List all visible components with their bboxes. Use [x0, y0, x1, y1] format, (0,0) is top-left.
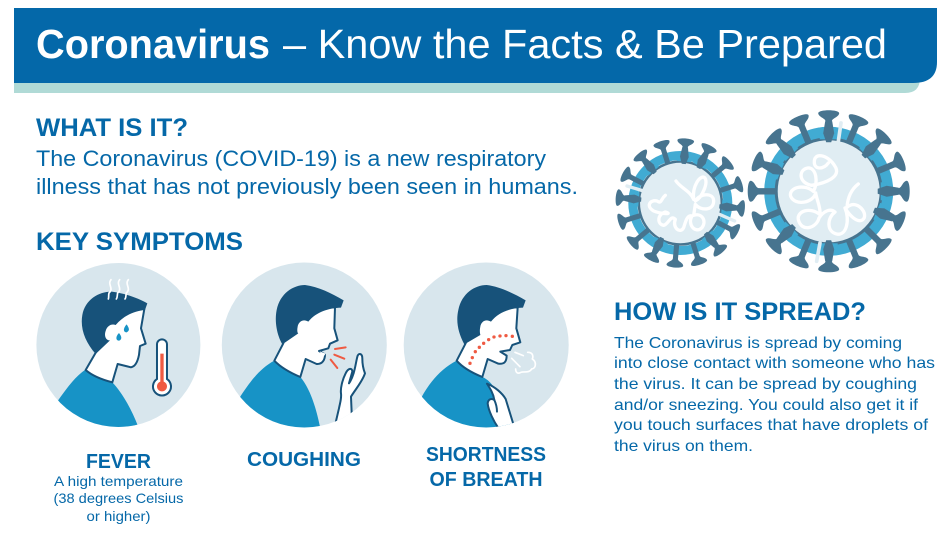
- icon: shortness of breath: [404, 262, 569, 435]
- icon: thermometer: [153, 339, 171, 395]
- title: Coronavirus: [36, 21, 270, 67]
- fever description: A high temperature: [54, 473, 183, 489]
- label: shortness of breath: OF BREATH: [430, 469, 542, 491]
- heading: key symptoms: KEY SYMPTOMS: [36, 228, 243, 256]
- text block: how it spreads: the virus on them.: [614, 438, 753, 455]
- text block: how it spreads: you touch surfaces that have droplets of: [614, 417, 929, 434]
- text block: definition: [36, 146, 578, 199]
- text block: how it spreads: and/or sneezing. You could also get it if: [614, 397, 919, 414]
- label: coughing: COUGHING: [247, 449, 361, 471]
- fever description: or higher): [86, 508, 150, 524]
- label: fever: FEVER: [86, 451, 152, 473]
- header banner: [14, 8, 937, 93]
- label: fever: [54, 451, 184, 524]
- text block: how it spreads: The Coronavirus is spread by coming: [614, 335, 902, 352]
- text block: how it spreads: [614, 335, 935, 455]
- banner teal shadow: [14, 70, 920, 93]
- title: – Know the Facts & Be Prepared: [283, 21, 887, 67]
- heading: how is it spread: HOW IS IT SPREAD?: [614, 298, 866, 326]
- text block: definition: illness that has not previously been seen in humans.: [36, 174, 578, 199]
- label: shortness of breath: SHORTNESS: [426, 444, 546, 466]
- heading: what is it: WHAT IS IT?: [36, 114, 188, 142]
- banner blue bar: [14, 8, 937, 83]
- icon: small virus: [615, 138, 746, 268]
- icon: fever: [36, 263, 200, 435]
- fever description: [54, 473, 184, 524]
- fever description: (38 degrees Celsius: [54, 490, 184, 506]
- icon: coughing: [222, 262, 387, 435]
- icon: large virus: [748, 110, 910, 272]
- hand: [487, 384, 516, 432]
- text block: definition: The Coronavirus (COVID-19) is a new respiratory: [36, 146, 547, 171]
- label: shortness of breath: [426, 444, 546, 491]
- text block: how it spreads: into close contact with someone who has: [614, 355, 935, 372]
- hand: [334, 354, 365, 428]
- text block: how it spreads: the virus. It can be spread by coughing: [614, 376, 917, 393]
